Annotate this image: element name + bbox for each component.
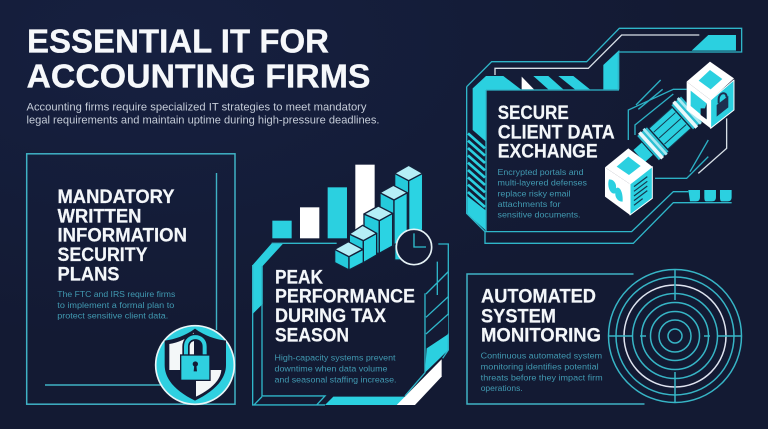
body text: Encrypted portals and [498, 167, 584, 177]
subtitle [26, 102, 380, 127]
body text: protect sensitive client data. [57, 310, 168, 320]
title: ESSENTIAL IT FOR [27, 23, 329, 60]
panel frame [253, 243, 448, 405]
heading: AUTOMATED [481, 286, 596, 308]
bar chart and frame artwork [253, 165, 448, 405]
body text: and seasonal staffing increase. [274, 374, 396, 384]
heading: PEAK [275, 266, 323, 288]
heading: MANDATORY [58, 186, 174, 208]
subtitle: legal requirements and maintain uptime during high-pressure deadlines. [26, 115, 380, 127]
body text [57, 289, 175, 320]
body text [498, 167, 587, 220]
icon: shield with padlock [156, 326, 234, 404]
body text: operations. [481, 383, 523, 393]
heading [498, 102, 615, 163]
body text: replace risky email [498, 188, 571, 198]
heading: PERFORMANCE [275, 286, 415, 308]
panel frame [467, 28, 742, 243]
panel: peak performance during tax season [253, 165, 448, 405]
body text: sensitive documents. [498, 210, 580, 220]
heading: PLANS [58, 263, 120, 285]
data tube [627, 88, 713, 169]
heading: CLIENT DATA [498, 121, 615, 143]
icon: lower cube with document [605, 148, 652, 215]
panel artwork [467, 28, 742, 243]
heading: SECURITY [58, 244, 148, 266]
body text: monitoring identifies potential [481, 362, 599, 372]
panel: secure client data exchange [467, 28, 742, 243]
panel: automated system monitoring [467, 269, 742, 404]
stepped isometric blocks [335, 165, 423, 270]
circuit lines [628, 80, 727, 178]
heading: SECURE [498, 102, 569, 124]
heading: INFORMATION [58, 225, 187, 247]
body text: to implement a formal plan to [57, 300, 175, 310]
body text: multi-layered defenses [498, 178, 587, 188]
title [26, 23, 370, 96]
heading [275, 266, 415, 346]
body text: Continuous automated system [481, 351, 602, 361]
title: ACCOUNTING FIRMS [26, 59, 370, 96]
panel frame [467, 274, 644, 404]
bars [272, 165, 375, 238]
heading: EXCHANGE [498, 141, 598, 163]
body text: downtime when data volume [274, 364, 388, 374]
body text: High-capacity systems prevent [274, 353, 396, 363]
heading [481, 286, 601, 347]
heading: WRITTEN [58, 206, 142, 228]
icon: upper cube with lock [687, 62, 734, 128]
icon: clock [396, 229, 432, 265]
radar chart [608, 269, 742, 403]
body text: threats before they impact firm [481, 372, 603, 382]
panel: written information security plans [27, 154, 235, 404]
heading: SEASON [275, 324, 349, 346]
body text: attachments for [498, 199, 561, 209]
heading: MONITORING [481, 325, 601, 347]
subtitle: Accounting firms require specialized IT strategies to meet mandatory [26, 102, 367, 114]
body text [481, 351, 603, 393]
heading [58, 186, 187, 285]
body text: The FTC and IRS require firms [57, 289, 175, 299]
heading: SYSTEM [481, 305, 556, 327]
body text [274, 353, 396, 384]
panel frame [27, 154, 235, 404]
heading: DURING TAX [275, 305, 386, 327]
